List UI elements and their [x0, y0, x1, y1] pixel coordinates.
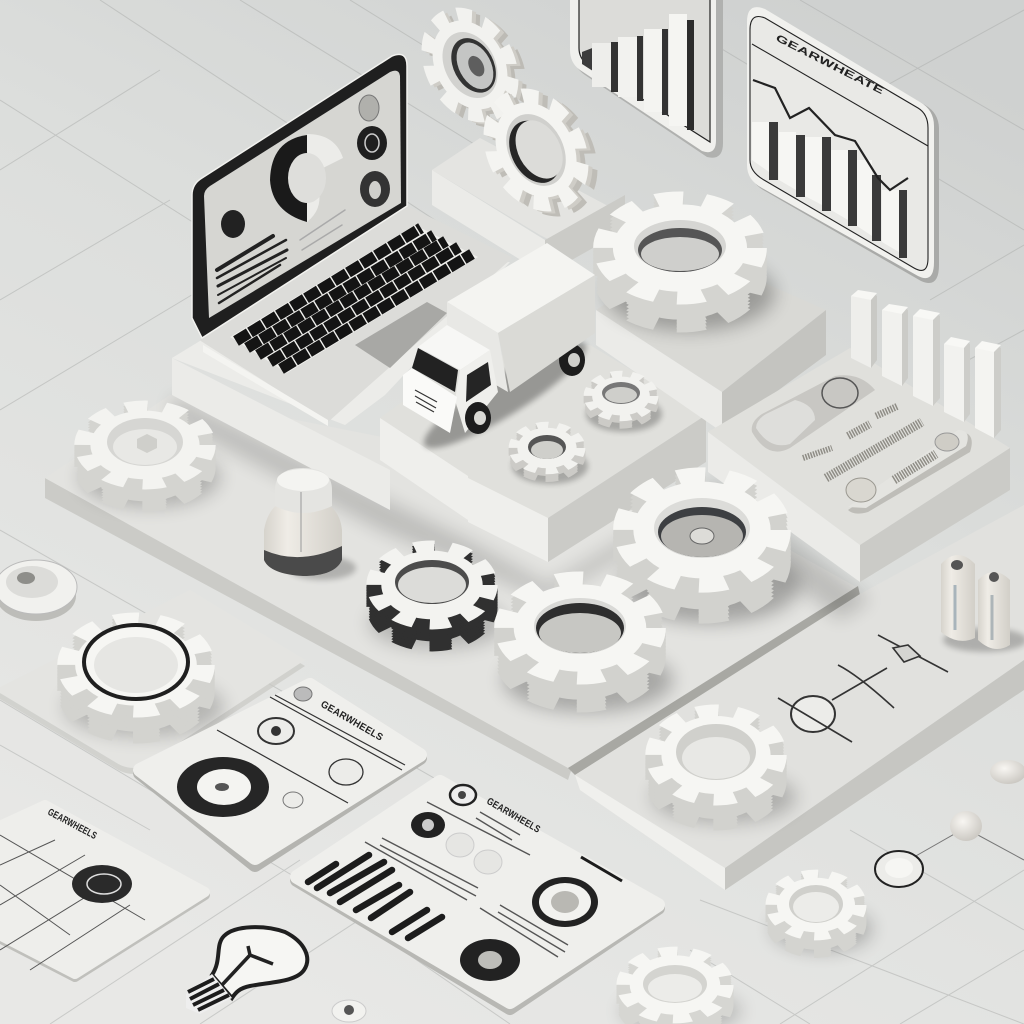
panel: card with black bars — [297, 782, 658, 1008]
bars in bar chart — [582, 14, 694, 130]
truck cab — [403, 325, 498, 433]
icon: gear with black ring — [64, 619, 224, 737]
chart columns — [752, 122, 907, 258]
small icons — [258, 687, 363, 808]
panel: card with grid — [0, 805, 205, 977]
screen text lines — [217, 210, 345, 303]
target donut — [177, 757, 269, 817]
panel: laptop pedestal — [172, 262, 510, 510]
fingerprint icon — [72, 865, 132, 903]
icon: small gear beside truck — [586, 374, 662, 432]
panel: left lower tile — [0, 590, 305, 774]
bar 3 — [913, 309, 940, 406]
trackpad — [355, 302, 447, 368]
laptop screen frame — [192, 54, 407, 338]
icon: upper upright gear — [411, 0, 537, 135]
card title: GEARWHEELS — [484, 796, 542, 836]
pedestal contact shadows — [172, 395, 870, 620]
chart title: GEARWHEATE — [774, 33, 886, 97]
raised pill with dial — [752, 375, 875, 452]
chart: floating line and bar chart panel — [747, 7, 939, 283]
cylinder 1 — [941, 555, 975, 641]
lens handle — [778, 698, 852, 742]
icon: pin and lens tools — [778, 635, 948, 742]
panel: main lower slab — [45, 395, 860, 780]
truck front wheel — [465, 402, 491, 434]
cross tool — [832, 665, 894, 708]
lens tool — [791, 696, 835, 732]
screen icons — [221, 95, 390, 238]
panel: small gears pedestal — [468, 345, 706, 562]
icon: disc at left edge — [0, 560, 77, 621]
laptop screen — [204, 71, 401, 318]
dotted text strips — [803, 406, 936, 480]
panel: embossed dashboard controls — [752, 375, 972, 514]
pin tool top — [878, 635, 948, 672]
card dividers — [217, 695, 405, 803]
bar 4 — [944, 337, 970, 422]
black bars — [308, 855, 442, 938]
small circles — [411, 785, 502, 874]
icon: lower upright gear — [472, 80, 609, 225]
laptop base — [202, 208, 510, 420]
panel: laptop — [192, 54, 510, 426]
icon: gear at lower right — [772, 874, 872, 953]
card lines — [365, 802, 568, 957]
panel: right dashboard pedestal — [708, 348, 1010, 582]
icon: big gear on top pedestal — [604, 199, 775, 331]
chart: floating bar chart panel — [570, 0, 723, 158]
card title: GEARWHEELS — [318, 699, 385, 744]
bar 2 — [882, 304, 908, 386]
icon: gear on left slab — [80, 406, 220, 507]
icon: light bulb — [186, 927, 307, 1014]
grid lines — [0, 835, 145, 970]
pin tool head — [893, 645, 920, 662]
icon: large front gear — [503, 579, 673, 712]
icon: small gear on pedestal — [512, 425, 588, 484]
chart: white 3D bars — [851, 290, 1001, 438]
icon: capped cylinder — [264, 468, 356, 580]
filament — [222, 946, 273, 985]
bar 1 — [851, 290, 877, 368]
icon: white cylinders — [941, 555, 1024, 652]
card title: GEARWHEELS — [46, 807, 99, 842]
icon: dark sided gear — [369, 546, 505, 649]
panel: back pedestal — [432, 138, 625, 275]
raised pill with dotted fields — [846, 430, 972, 514]
dark gear icon — [460, 939, 520, 981]
icon: delivery truck — [403, 243, 596, 462]
panel: truck pedestal left — [380, 345, 620, 520]
cylinder 2 — [978, 572, 1010, 649]
keyboard — [230, 225, 478, 373]
icon: gear on right slab — [652, 711, 796, 824]
panel: big gear pedestal — [596, 250, 826, 432]
icon: large centre gear — [620, 475, 800, 623]
icon: small knob — [332, 1000, 366, 1022]
ring icon — [532, 877, 598, 927]
truck rear wheel — [559, 344, 585, 376]
bar 5 — [975, 341, 1001, 438]
panel: right lower slab — [575, 505, 1024, 890]
cargo box — [447, 243, 595, 392]
donut chart — [270, 134, 343, 222]
icon: gear at bottom — [621, 952, 741, 1024]
chart trend line — [753, 80, 908, 190]
icon: node diagram — [875, 760, 1024, 887]
screw base — [186, 974, 232, 1014]
panel: card with target chart — [140, 685, 420, 865]
